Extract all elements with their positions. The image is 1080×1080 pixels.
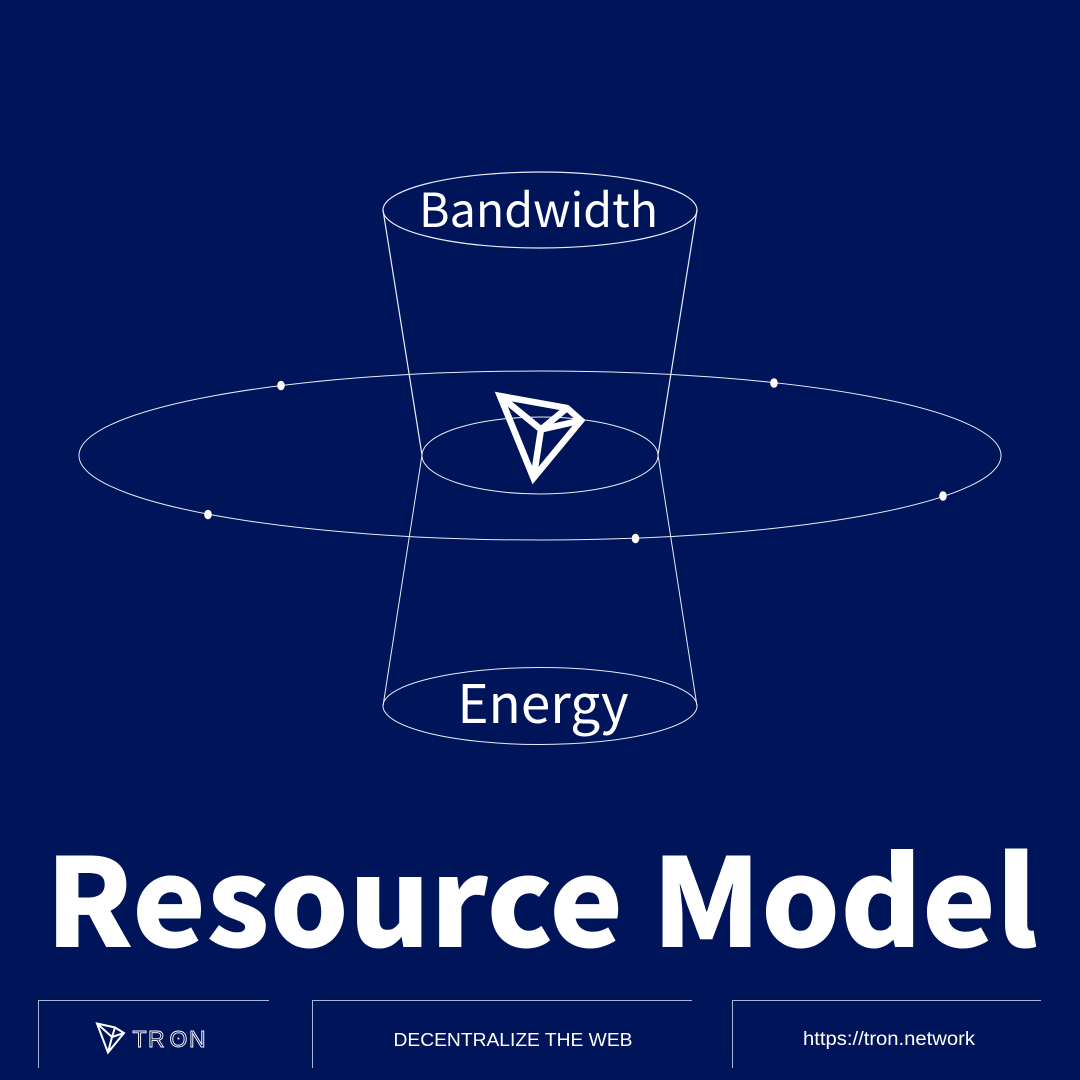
icon: small TRON logo xyxy=(97,1024,124,1052)
title: Resource Model xyxy=(46,805,1038,983)
footer panel: logo xyxy=(38,1000,269,1068)
label: Bandwidth: Bandwidth xyxy=(419,172,658,241)
footer panel: url xyxy=(732,1000,1041,1068)
icon: central TRON logo xyxy=(500,396,581,478)
orbit ellipse xyxy=(79,371,1001,540)
footer panel: slogan xyxy=(312,1000,692,1068)
top funnel: bandwidth xyxy=(383,172,697,455)
centre ellipse xyxy=(422,417,658,494)
url text: https://tron.network xyxy=(803,1029,976,1050)
orbit dots xyxy=(204,378,947,543)
label: Energy: Energy xyxy=(457,663,629,739)
wordmark: TRON xyxy=(132,1026,206,1052)
diagram: resource model xyxy=(79,172,1001,744)
bottom funnel: energy xyxy=(383,455,697,744)
slogan text: DECENTRALIZE THE WEB xyxy=(394,1029,632,1050)
